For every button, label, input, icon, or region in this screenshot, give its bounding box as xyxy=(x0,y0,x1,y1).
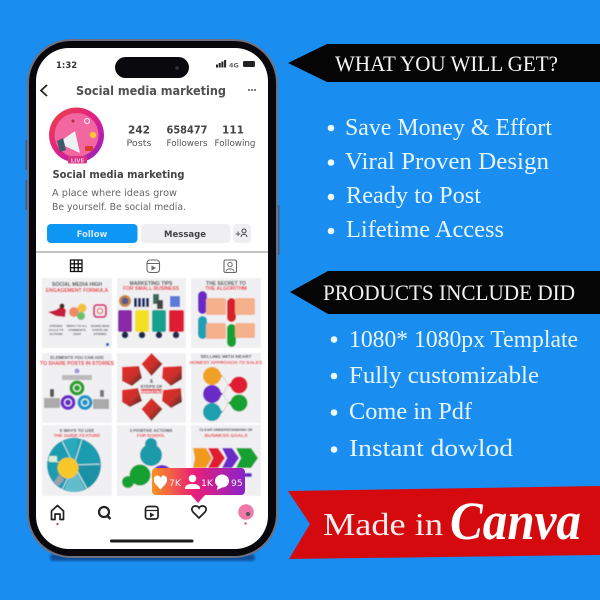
post: business goals xyxy=(191,425,261,496)
post: secret to the algorithm: THE ALGORITHM xyxy=(205,286,247,292)
stats: 242 xyxy=(128,124,150,136)
post: positive actions xyxy=(117,425,186,496)
post: marketing tips: MARKETING TIPS xyxy=(130,281,173,287)
post: secret to the algorithm: THE SECRET TO xyxy=(206,281,246,287)
post: steps of marketing: STEPS OF xyxy=(140,384,163,389)
ribbon: made in canva: Made in xyxy=(323,506,443,542)
status bar xyxy=(56,57,255,78)
avatar: LIVE xyxy=(71,158,85,164)
post: engagement formula: SHARE NEW xyxy=(91,324,109,328)
action buttons xyxy=(47,224,251,243)
action buttons: + xyxy=(235,230,241,238)
bottom navigation xyxy=(52,504,254,525)
ribbon: made in canva xyxy=(288,486,600,559)
post: guide feature xyxy=(42,425,112,496)
post: engagement formula: STRONG xyxy=(50,324,63,328)
stats: 111 xyxy=(222,124,244,136)
list: product details: 1080* 1080px Template xyxy=(349,327,578,353)
status bar: 1:32 xyxy=(56,61,77,71)
action buttons: Follow xyxy=(77,230,108,240)
bio: A place where ideas grow xyxy=(52,188,177,199)
post: engagement formula: STORIES xyxy=(93,332,107,336)
post: engagement formula: ASAP xyxy=(73,332,81,336)
status bar: 4G xyxy=(229,62,239,70)
icon: profile avatar xyxy=(238,504,254,520)
banner: products include: PRODUCTS INCLUDE DID xyxy=(323,280,575,305)
engagement popup: 7K xyxy=(169,478,182,489)
stats: Following xyxy=(214,139,256,149)
list: product details: Come in Pdf xyxy=(349,399,472,425)
post: share posts in stories: ELEMENTS YOU CAN ADD xyxy=(50,355,104,360)
post: guide feature: 5 WAYS TO USE xyxy=(60,428,94,433)
bio: Social media marketing xyxy=(52,169,184,181)
post: engagement formula: COMMENTS xyxy=(68,328,86,332)
bio: Be yourself. Be social media. xyxy=(52,202,186,213)
stats: 658477 xyxy=(166,124,208,136)
post: share posts in stories: TO SHARE POSTS IN STORIES xyxy=(40,361,115,367)
stats: Followers xyxy=(166,139,208,149)
stats: Posts xyxy=(126,139,152,149)
list: product details xyxy=(331,327,578,462)
post grid xyxy=(40,278,262,496)
engagement popup: 95 xyxy=(231,478,243,489)
post: engagement formula: REPLY TO ALL xyxy=(66,324,88,328)
divider xyxy=(36,252,268,253)
list: benefits: Viral Proven Design xyxy=(345,149,549,175)
list: benefits: Save Money & Effort xyxy=(345,115,552,141)
post: share posts in stories xyxy=(40,353,115,423)
list: benefits xyxy=(328,115,552,243)
engagement popup xyxy=(152,468,245,503)
list: product details: Fully customizable xyxy=(349,363,539,389)
post: steps of marketing xyxy=(117,353,186,423)
post: business goals: BUSINESS GOALS xyxy=(205,433,248,439)
post: secret to the algorithm xyxy=(191,278,261,348)
post: engagement formula: ENGAGEMENT FORMULA xyxy=(46,288,108,294)
icon: search xyxy=(99,507,110,519)
post: engagement formula: ACTIONS xyxy=(49,332,63,336)
banner: what you will get xyxy=(288,44,600,82)
post: guide feature: THE GUIDE FEATURE xyxy=(54,433,100,438)
post: marketing tips: FOR SMALL BUSINESS xyxy=(123,286,180,292)
list: benefits: Ready to Post xyxy=(346,183,481,209)
home indicator xyxy=(110,540,194,542)
icon: heart xyxy=(192,506,206,518)
ribbon: made in canva: Canva xyxy=(450,491,581,551)
engagement popup: 1K xyxy=(201,478,214,489)
banner: products include xyxy=(290,271,600,314)
profile header: Social media marketing xyxy=(76,84,226,98)
post: selling with heart: HONEST APPROACH TO SALES xyxy=(190,360,262,365)
post: engagement formula: SOCIAL MEDIA HIGH xyxy=(52,282,102,288)
post: positive actions: FOR SCHOOL xyxy=(137,433,165,438)
post: steps of marketing: MARKETING xyxy=(140,390,163,394)
post: engagement formula: POSTS ON xyxy=(92,328,108,332)
banner: what you will get: WHAT YOU WILL GET? xyxy=(335,51,558,76)
list: product details: Instant dowlod xyxy=(349,436,513,462)
post: positive actions: 3 POSITIVE ACTIONS xyxy=(130,428,173,433)
tab icons xyxy=(70,260,236,272)
icon: home xyxy=(52,506,64,520)
list: benefits: Lifetime Access xyxy=(346,217,504,243)
post: selling with heart: SELLING WITH HEART xyxy=(200,354,252,359)
post: selling with heart xyxy=(190,353,262,423)
phone xyxy=(26,39,280,561)
post: marketing tips xyxy=(117,278,186,348)
post: steps of marketing: 6 xyxy=(150,379,153,385)
post: engagement formula xyxy=(42,278,112,348)
bio xyxy=(52,169,186,213)
stats xyxy=(126,124,256,149)
action buttons: Message xyxy=(164,230,206,240)
post: business goals: CLEAR UNDERSTANDING OF xyxy=(199,428,253,432)
post: engagement formula: CALLS TO xyxy=(49,328,64,332)
avatar xyxy=(49,108,104,164)
icon: reels xyxy=(146,506,158,519)
